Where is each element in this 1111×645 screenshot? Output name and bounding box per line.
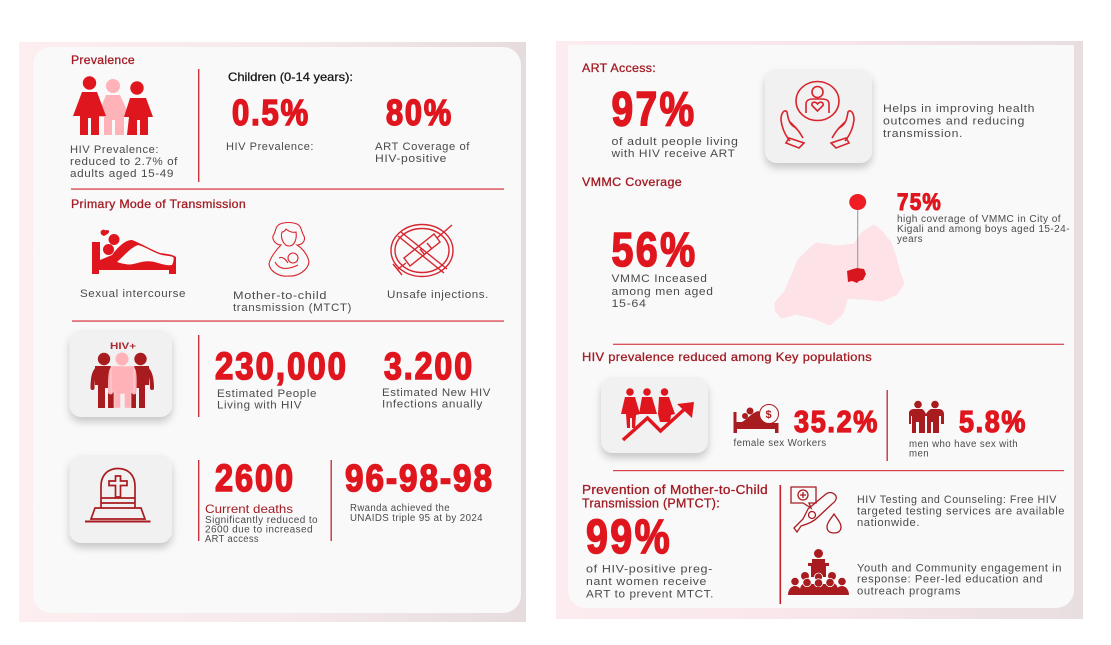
stat: men who have sex with men: men bbox=[909, 448, 929, 460]
stat: current deaths: 2600 due to increased bbox=[205, 524, 313, 536]
stat: female sex workers: $ bbox=[766, 409, 772, 421]
stat: 97 percent: with HIV receive ART bbox=[610, 148, 736, 160]
stat: current deaths: 2600 bbox=[215, 458, 295, 500]
stat: child ART coverage: ART Coverage of bbox=[375, 141, 470, 153]
stat: female sex workers bbox=[734, 404, 879, 449]
stat: people living with HIV: 230,000 bbox=[215, 346, 348, 388]
stat: 99 percent: ART to prevent MTCT. bbox=[586, 588, 714, 600]
icon: HIV test kit bbox=[791, 487, 841, 533]
icon card: gravestone bbox=[70, 455, 172, 543]
text: adult prevalence bbox=[70, 144, 178, 180]
text: adult prevalence: HIV Prevalence: bbox=[70, 144, 159, 156]
heading: VMMC coverage: VMMC Coverage bbox=[582, 175, 682, 189]
heading: Prevalence: Prevalence bbox=[71, 53, 135, 67]
heading: PMTCT bbox=[582, 483, 768, 510]
stat: men who have sex with men: men who have sex with bbox=[909, 439, 1018, 450]
text: testing and counselling: HIV Testing and Counseling: Free HIV bbox=[857, 494, 1057, 506]
stat: men who have sex with men bbox=[909, 401, 1027, 460]
stat: 97 percent: of adult people living bbox=[612, 136, 738, 148]
stat: child ART coverage: HIV-positive bbox=[375, 153, 447, 165]
icon: community gathering bbox=[788, 549, 849, 595]
text: ART benefit: transmission. bbox=[883, 128, 963, 140]
stat: female sex workers: female sex Workers bbox=[734, 438, 826, 449]
text: ART benefit: outcomes and reducing bbox=[883, 116, 1025, 128]
stat: child ART coverage bbox=[375, 92, 470, 165]
stat: child HIV prevalence: HIV Prevalence: bbox=[226, 141, 314, 153]
text: youth and community engagement: outreach programs bbox=[857, 586, 961, 598]
text: youth and community engagement: response: Peer-led education and bbox=[857, 574, 1043, 586]
stat: child ART coverage: 80% bbox=[386, 92, 453, 133]
stat: current deaths: Significantly reduced to bbox=[205, 515, 318, 526]
text: testing and counselling bbox=[857, 494, 1065, 529]
text: unsafe injections: Unsafe injections. bbox=[387, 289, 489, 301]
stat: current deaths bbox=[205, 458, 318, 545]
stat: people living with HIV: Living with HIV bbox=[217, 400, 302, 412]
icon card: HIV+ people bbox=[70, 330, 172, 417]
heading: key populations: HIV prevalence reduced among Key populations bbox=[582, 350, 872, 364]
stat: female sex workers: 35.2% bbox=[794, 404, 879, 439]
stat: 99 percent: 99% bbox=[586, 511, 672, 564]
heading: ART access: ART Access: bbox=[582, 61, 656, 75]
text: ART benefit bbox=[883, 103, 1035, 140]
stat: current deaths: ART access bbox=[205, 534, 259, 545]
text: mother to child: transmission (MTCT) bbox=[233, 302, 352, 314]
text: adult prevalence: reduced to 2.7% of bbox=[70, 156, 178, 168]
stat: child HIV prevalence bbox=[226, 92, 314, 153]
icon: mother and child bbox=[269, 222, 309, 276]
stat: child HIV prevalence: 0.5% bbox=[232, 92, 310, 133]
icon: bed bbox=[92, 230, 176, 274]
stat: 97 percent bbox=[610, 84, 738, 160]
text: mother to child: Mother-to-child bbox=[233, 290, 327, 302]
stat: 75 percent: 75% bbox=[897, 189, 942, 216]
stat: triple 95: 96-98-98 bbox=[345, 458, 494, 500]
text: youth and community engagement: Youth and Community engagement in bbox=[857, 562, 1062, 574]
text: adult prevalence: adults aged 15-49 bbox=[70, 168, 174, 180]
stat: men who have sex with men: 5.8% bbox=[959, 404, 1027, 439]
stat: people living with HIV bbox=[215, 346, 348, 412]
icon card: HIV+ people: HIV+ bbox=[110, 341, 137, 352]
text: mother to child bbox=[233, 290, 352, 314]
stat: 75 percent: Kigali and among boys aged 15-24- bbox=[897, 224, 1070, 235]
stat: new infections bbox=[382, 346, 491, 410]
text: sexual intercourse: Sexual intercourse bbox=[80, 288, 186, 300]
stat: 75 percent: years bbox=[897, 234, 923, 245]
stat: 99 percent: nant women receive bbox=[586, 576, 707, 588]
stat: 56 percent: 15-64 bbox=[612, 298, 646, 310]
stat: 99 percent: of HIV-positive preg- bbox=[586, 564, 713, 576]
stat: new infections: Estimated New HIV bbox=[382, 387, 491, 399]
stat: triple 95: Rwanda achieved the bbox=[350, 503, 450, 514]
stat: 56 percent: among men aged bbox=[612, 286, 714, 298]
icon: no unsafe syringe bbox=[391, 224, 453, 276]
icon: family of three bbox=[73, 76, 153, 135]
heading: children: Children (0-14 years): bbox=[228, 70, 353, 84]
stat: triple 95 bbox=[345, 458, 494, 524]
text: testing and counselling: nationwide. bbox=[857, 517, 920, 529]
icon card: people with rising arrow bbox=[601, 377, 708, 453]
stat: 56 percent: 56% bbox=[612, 224, 698, 277]
icon card: caring hands bbox=[765, 69, 872, 163]
stat: triple 95: UNAIDS triple 95 at by 2024 bbox=[350, 513, 483, 524]
heading: primary mode of transmission: Primary Mode of Transmission bbox=[71, 197, 246, 211]
stat: people living with HIV: Estimated People bbox=[217, 388, 317, 400]
panel: right sheet bbox=[556, 41, 1083, 619]
stat: 56 percent: VMMC Inceased bbox=[612, 273, 708, 285]
stat: 56 percent bbox=[612, 224, 714, 310]
panel: left sheet bbox=[19, 42, 526, 622]
stat: 99 percent bbox=[586, 511, 714, 600]
text: ART benefit: Helps in improving health bbox=[883, 103, 1035, 115]
stat: current deaths: Current deaths bbox=[205, 502, 293, 516]
stat: 75 percent bbox=[897, 189, 1070, 245]
stat: 97 percent: 97% bbox=[612, 84, 696, 136]
heading: PMTCT: Prevention of Mother-to-Child bbox=[582, 483, 768, 497]
heading: PMTCT: Transmission (PMTCT): bbox=[582, 496, 720, 510]
text: testing and counselling: targeted testing services are available bbox=[857, 506, 1065, 518]
stat: new infections: 3.200 bbox=[384, 346, 474, 388]
stat: new infections: Infections anually bbox=[382, 398, 483, 410]
stat: 75 percent: high coverage of VMMC in City of bbox=[897, 214, 1061, 225]
map: Rwanda with Kigali pin bbox=[776, 194, 903, 324]
text: youth and community engagement bbox=[857, 562, 1062, 598]
